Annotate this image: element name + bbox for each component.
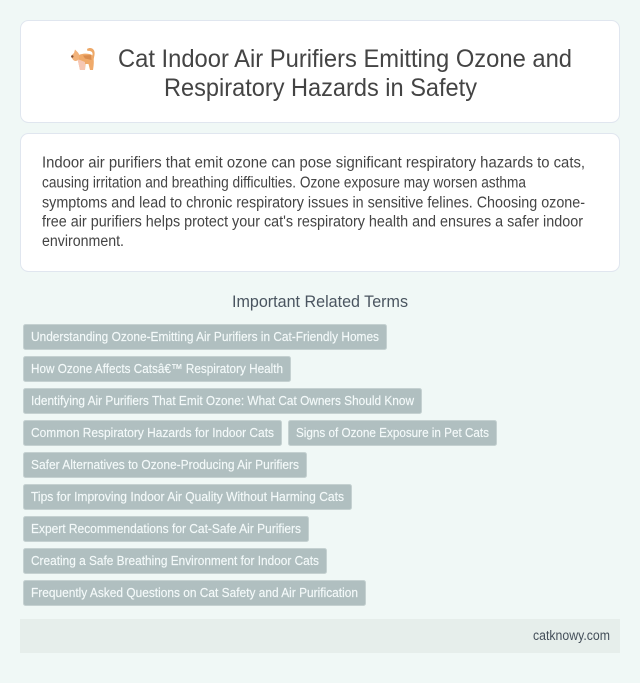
title panel — [20, 20, 620, 122]
panel: summary: causing irritation and breathing difficulties. Ozone exposure may worsen asthma — [42, 174, 526, 192]
tag 6 — [24, 452, 306, 478]
footer: catknowy.com — [533, 628, 610, 643]
panel: summary: free air purifiers helps protect your cat's respiratory health and ensures a safer indoor — [42, 214, 583, 230]
tag 7 — [24, 484, 352, 510]
tag 8: Expert Recommendations for Cat-Safe Air Purifiers — [31, 521, 301, 536]
tag 9: Creating a Safe Breathing Environment for Indoor Cats — [31, 553, 319, 568]
tag 7: Tips for Improving Indoor Air Quality Without Harming Cats — [31, 489, 344, 504]
tag 6: Safer Alternatives to Ozone-Producing Air Purifiers — [31, 457, 299, 472]
title text: Cat Indoor Air Purifiers Emitting Ozone and — [118, 45, 572, 73]
tag 1 — [24, 324, 386, 350]
tag 2: How Ozone Affects Catsâ€™ Respiratory Health — [31, 361, 283, 376]
tag 4 — [24, 420, 282, 446]
panel: summary: symptoms and lead to chronic respiratory issues in sensitive felines. Choosing ozone- — [42, 194, 585, 212]
tag 2 — [24, 356, 290, 382]
tag 10: Frequently Asked Questions on Cat Safety and Air Purification — [31, 585, 358, 600]
tag 3 — [24, 388, 422, 414]
icon: cat — [71, 48, 95, 70]
panel: summary: environment. — [42, 233, 124, 250]
panel: summary: Indoor air purifiers that emit ozone can pose significant respiratory hazards to cats, — [42, 154, 585, 172]
tag 9 — [24, 548, 326, 574]
tag 1: Understanding Ozone-Emitting Air Purifiers in Cat-Friendly Homes — [31, 329, 379, 344]
title text — [118, 45, 572, 102]
tag 5 — [288, 420, 496, 446]
panel: summary — [20, 134, 620, 272]
tag 8 — [24, 516, 308, 542]
heading: related terms: Important Related Terms — [232, 293, 408, 311]
tag 5: Signs of Ozone Exposure in Pet Cats — [296, 425, 489, 440]
tag 10 — [24, 580, 366, 606]
title text: Respiratory Hazards in Safety — [164, 74, 477, 102]
tag 3: Identifying Air Purifiers That Emit Ozone: What Cat Owners Should Know — [31, 393, 415, 408]
tag 4: Common Respiratory Hazards for Indoor Cats — [31, 425, 274, 440]
tag list — [24, 324, 496, 606]
footer — [20, 619, 620, 653]
